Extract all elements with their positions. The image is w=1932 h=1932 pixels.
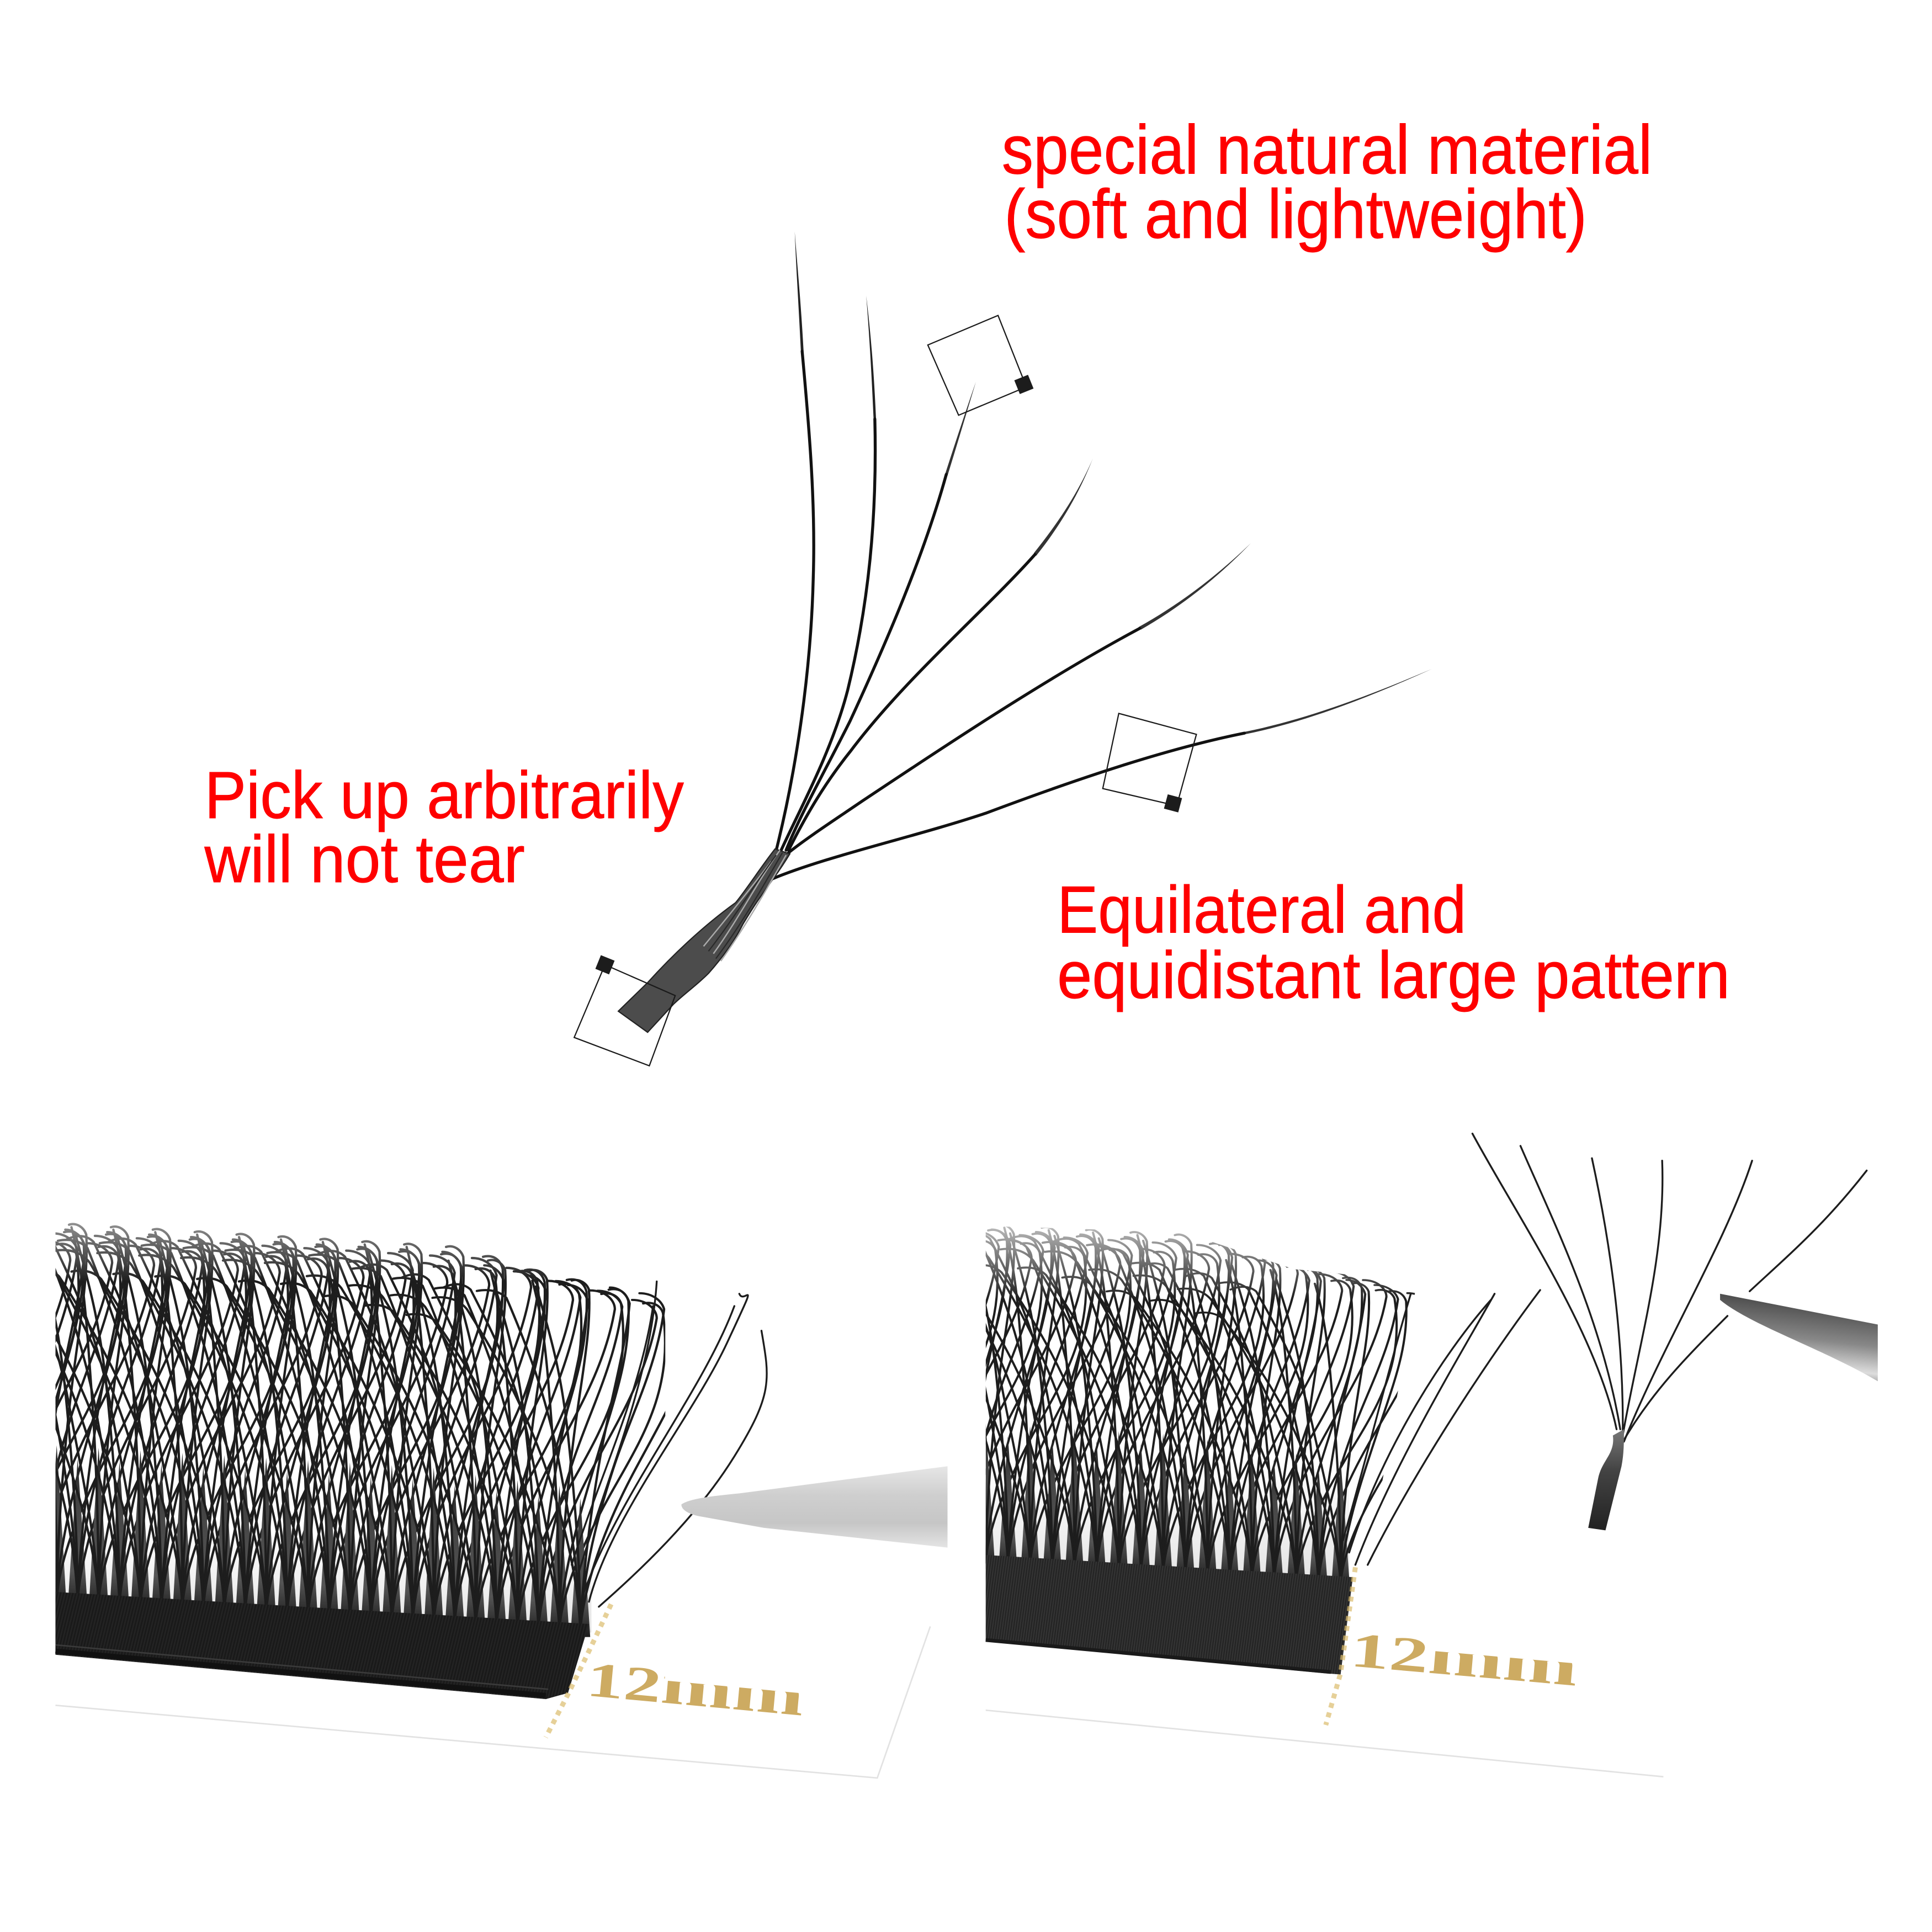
panel: left lash strip <box>0 1201 948 1778</box>
tip fade <box>986 1226 1417 1300</box>
strand 6 <box>770 669 1432 880</box>
strand 3 <box>786 382 976 850</box>
shadow <box>55 1522 591 1633</box>
card outline <box>55 1626 930 1778</box>
strand 2 <box>781 296 876 850</box>
tip fade <box>55 1201 672 1281</box>
heading: pick up arbitrarily: Pick up arbitrarily <box>205 758 684 832</box>
heading: special natural material: (soft and lightweight) <box>1004 176 1587 253</box>
heading: special natural material: special natural material <box>1002 112 1652 189</box>
heading: special natural material <box>1002 112 1652 253</box>
heading: equilateral and equidistant: equidistant large pattern <box>1057 938 1730 1012</box>
tweezers <box>1720 1294 1878 1381</box>
black lash band <box>986 1555 1353 1674</box>
card outline <box>986 1710 1663 1777</box>
shadow <box>986 1460 1349 1583</box>
gold 12mm label <box>1348 1616 1585 1699</box>
callout box: tip <box>928 315 1033 415</box>
gold 12mm label: 12 mm <box>584 1646 807 1728</box>
heading: pick up arbitrarily <box>204 758 684 896</box>
strand 1 <box>776 232 814 850</box>
gold edge strip <box>1326 1567 1355 1725</box>
heading: pick up arbitrarily: will not tear <box>204 822 525 896</box>
callout box: strand <box>1103 713 1196 813</box>
main lash fan <box>618 232 1432 1032</box>
panel: right lash strip <box>985 1133 1878 1777</box>
lash cluster row <box>986 1227 1415 1577</box>
tweezers <box>681 1466 948 1548</box>
heading: equilateral and equidistant <box>1057 873 1730 1012</box>
gold 12mm label: 12 mm <box>1348 1616 1580 1699</box>
heading: equilateral and equidistant: Equilateral and <box>1057 873 1466 947</box>
lash cluster row <box>55 1223 666 1637</box>
black lash band <box>55 1592 589 1699</box>
callout box: root <box>574 955 675 1066</box>
gold edge strip <box>546 1604 611 1737</box>
twisted lash root <box>618 849 790 1032</box>
strand 5 <box>789 543 1251 853</box>
single lash fan <box>1472 1134 1867 1530</box>
stray right strands <box>572 1281 767 1607</box>
stray right strands <box>1343 1290 1540 1565</box>
strand 4 <box>789 458 1093 850</box>
gold 12mm label <box>584 1646 812 1729</box>
